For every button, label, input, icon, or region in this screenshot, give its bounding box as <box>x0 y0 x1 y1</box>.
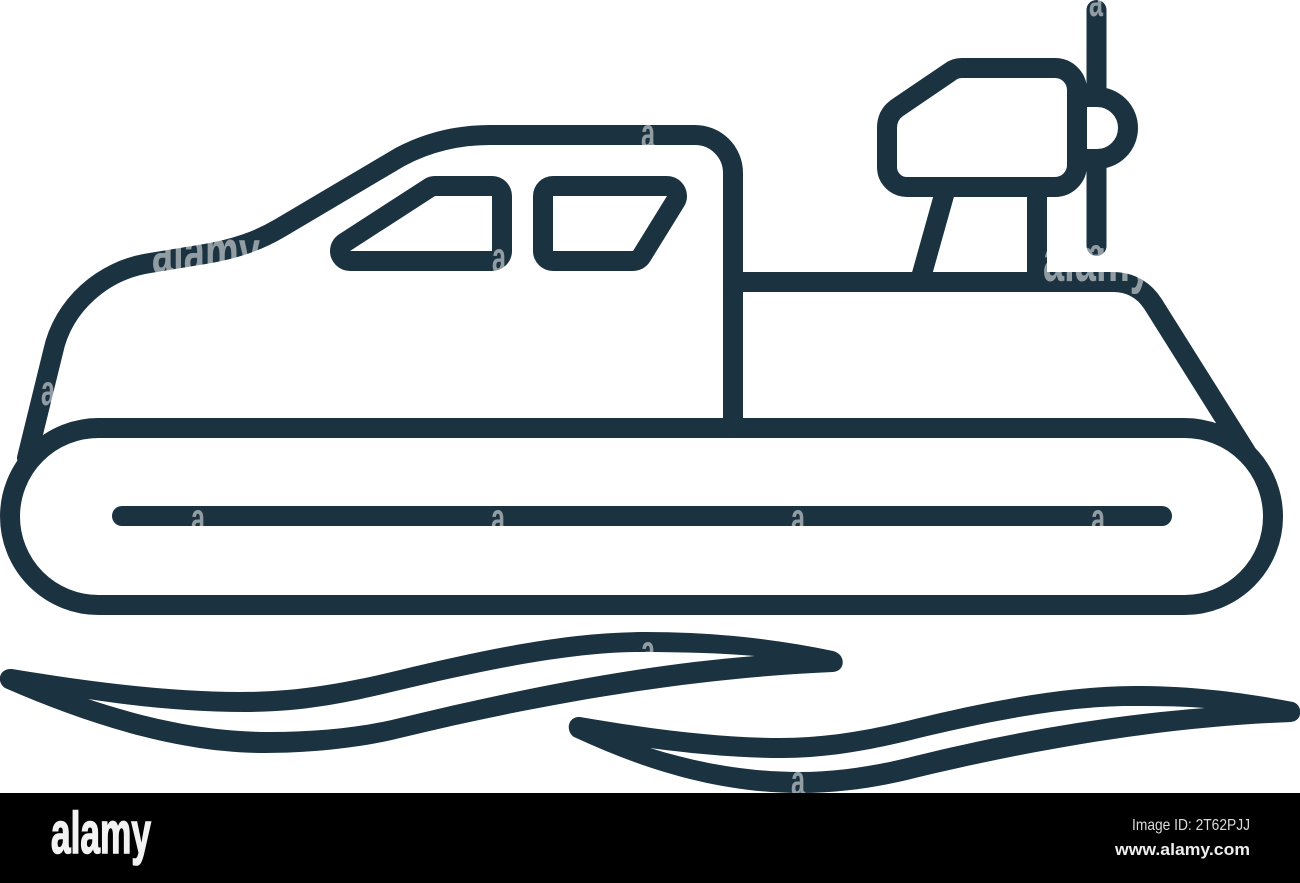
engine housing <box>887 68 1077 187</box>
front cabin window <box>350 196 492 251</box>
propeller hub <box>1087 97 1128 159</box>
watermark letters: a <box>791 495 806 543</box>
watermark letters: a <box>641 627 656 675</box>
footer bar <box>0 793 1300 883</box>
watermark letters: a <box>1089 230 1104 278</box>
watermark text cabin: alamy <box>152 218 260 287</box>
propeller blade upper <box>1086 10 1106 92</box>
watermark letters: a <box>791 757 806 805</box>
watermark letters: a <box>1091 495 1106 543</box>
engine strut left <box>921 187 946 276</box>
watermark letters: a <box>491 495 506 543</box>
icon: hovercraft <box>10 10 1273 605</box>
wave right <box>569 686 1300 793</box>
watermark letters: a <box>641 110 656 158</box>
watermark letters: a <box>191 495 206 543</box>
rear cabin window <box>553 196 667 251</box>
image id: Image ID: 2T62PJJ <box>1132 817 1250 834</box>
watermark letters: a <box>41 367 56 415</box>
website: www.alamy.com <box>1114 840 1250 859</box>
cabin outline <box>27 135 733 458</box>
propeller blade lower <box>1086 164 1106 246</box>
rear deck <box>733 282 1246 452</box>
watermark text deck: alamy <box>1043 226 1151 295</box>
watermark letters <box>41 0 1106 805</box>
watermark letters: a <box>492 234 507 282</box>
engine strut right <box>1027 187 1047 282</box>
watermark fragments <box>41 0 1151 805</box>
hull tube <box>10 428 1273 605</box>
footer logo: alamy <box>51 801 151 866</box>
hull centre line <box>122 506 1162 526</box>
wave left <box>0 632 843 753</box>
